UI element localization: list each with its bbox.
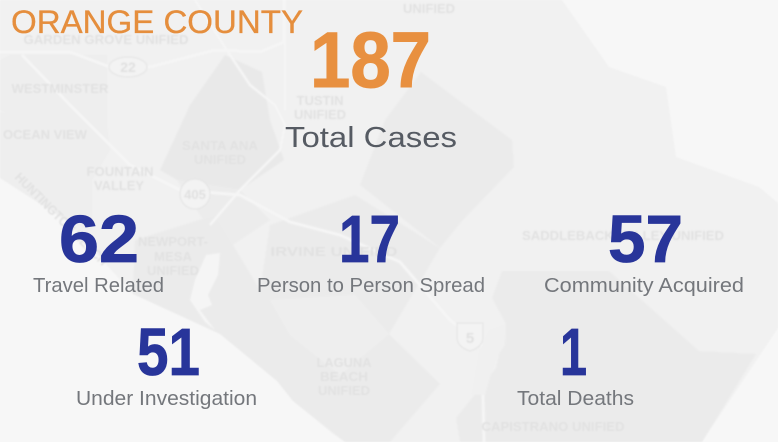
stat: travel related: Travel Related (33, 275, 164, 297)
background map: BEACH (320, 369, 368, 384)
background map: 22 (120, 59, 136, 75)
background map: TUSTIN (296, 93, 344, 108)
background map: VALLEY (94, 178, 144, 193)
background map: UNIFIED (147, 263, 199, 278)
background map: UNIFIED (194, 152, 246, 167)
background map: MESA (154, 249, 193, 264)
total cases number: 187 (310, 15, 431, 104)
stat: person to person spread: 17 (339, 202, 400, 277)
stat: travel related: 62 (59, 202, 139, 277)
stat: travel related (33, 202, 164, 297)
stat: person to person spread (257, 202, 485, 297)
stat: total deaths (517, 315, 634, 410)
background map: 405 (184, 187, 206, 202)
stat: under investigation (76, 315, 257, 410)
background map: FOUNTAIN (86, 164, 154, 179)
stat: community acquired (544, 202, 744, 297)
background map: SANTA ANA (182, 138, 259, 153)
total cases label: Total Cases (285, 122, 457, 154)
background map: GARDEN GROVE UNIFIED (24, 32, 189, 47)
stat: under investigation: Under Investigation (76, 388, 257, 410)
stat: person to person spread: Person to Person Spread (257, 275, 485, 297)
stat: under investigation: 51 (137, 315, 200, 390)
stat: community acquired: 57 (608, 202, 683, 277)
background map: 5 (466, 330, 474, 347)
stat: total deaths: Total Deaths (517, 388, 634, 410)
background map: UNIFIED (294, 107, 346, 122)
background map: LAGUNA (316, 355, 372, 370)
background map: OCEAN VIEW (3, 127, 88, 142)
background map: CAPISTRANO UNIFIED (482, 419, 624, 434)
background map: UNIFIED (403, 1, 455, 16)
background map: IRVINE UNIFIED (270, 244, 398, 259)
stat: total deaths: 1 (560, 315, 587, 390)
background map: HUNTINGTON BEACH (12, 170, 111, 269)
title: ORANGE COUNTY (11, 4, 303, 40)
background map: SADDLEBACK VALLEY UNIFIED (522, 228, 724, 243)
stat: community acquired: Community Acquired (544, 275, 744, 297)
background map: UNIFIED (318, 383, 370, 398)
background map: NEWPORT- (138, 234, 208, 249)
background map: WESTMINSTER (12, 81, 109, 96)
